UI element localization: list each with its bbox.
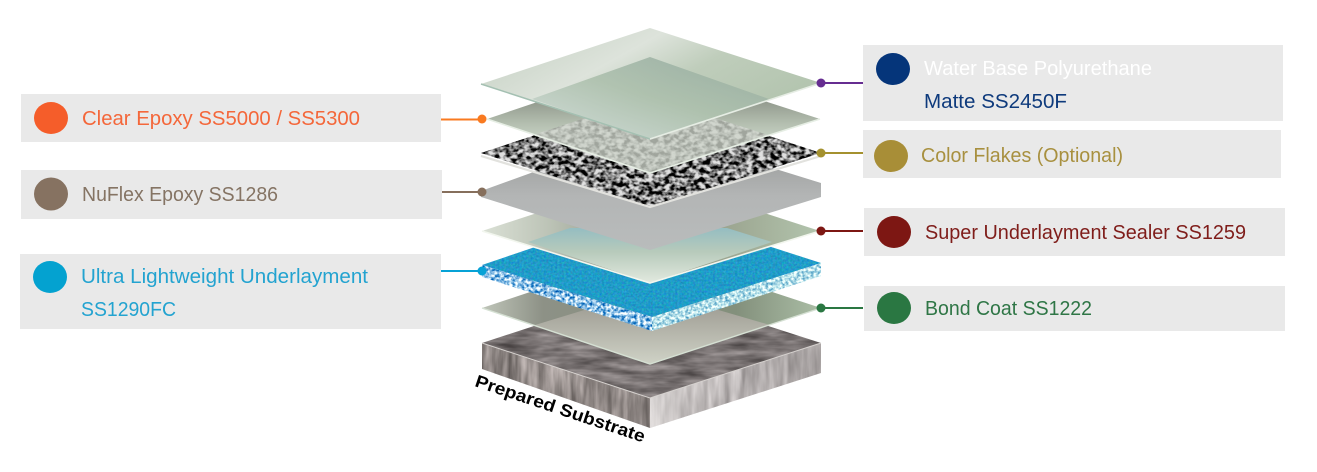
connector: Color Flakes — [816, 148, 863, 158]
gray NuFlex Epoxy layer — [481, 130, 821, 250]
glass layer: Super Underlayment Sealer — [482, 176, 820, 283]
label: Prepared Substrate: Prepared Substrate — [473, 371, 648, 446]
panel: Water Base Polyurethane label: Matte SS2450F — [924, 91, 1067, 113]
panel: Bond Coat label: Bond Coat SS1222 — [925, 298, 1092, 320]
connector: Ultra Lightweight Underlayment — [441, 266, 486, 276]
glass layer: Bond Coat — [482, 252, 821, 364]
glass layer: Clear Epoxy — [487, 102, 820, 174]
panel: Ultra Lightweight Underlayment label — [20, 254, 441, 329]
panel: Super Underlayment Sealer label: Super Underlayment Sealer SS1259 — [925, 222, 1246, 244]
connector: Water Base Polyurethane — [816, 78, 863, 88]
panel: NuFlex Epoxy label: NuFlex Epoxy SS1286 — [82, 184, 278, 206]
panel: Ultra Lightweight Underlayment label: Ultra Lightweight Underlayment — [81, 266, 368, 288]
blue underlayment layer — [482, 246, 821, 331]
connector: NuFlex Epoxy — [442, 188, 486, 196]
panel: Super Underlayment Sealer label — [864, 208, 1285, 256]
panel: Water Base Polyurethane label — [863, 45, 1283, 121]
substrate block — [482, 326, 821, 428]
panel: Bond Coat label — [864, 286, 1285, 331]
connector: Bond Coat — [816, 304, 863, 312]
color flakes layer — [480, 136, 820, 208]
panel: Color Flakes label — [863, 130, 1281, 178]
panel: Water Base Polyurethane label: Water Base Polyurethane — [924, 58, 1152, 80]
panel: Clear Epoxy label — [21, 94, 441, 142]
connector: Super Underlayment Sealer — [816, 226, 863, 236]
connector: Clear Epoxy — [441, 114, 486, 124]
panel: NuFlex Epoxy label — [21, 170, 442, 219]
panel: Ultra Lightweight Underlayment label: SS1290FC — [81, 299, 176, 321]
panel: Clear Epoxy label: Clear Epoxy SS5000 / SS5300 — [82, 108, 360, 130]
glass layer: Water Base Polyurethane — [481, 28, 821, 139]
panel: Color Flakes label: Color Flakes (Optional) — [921, 145, 1123, 167]
